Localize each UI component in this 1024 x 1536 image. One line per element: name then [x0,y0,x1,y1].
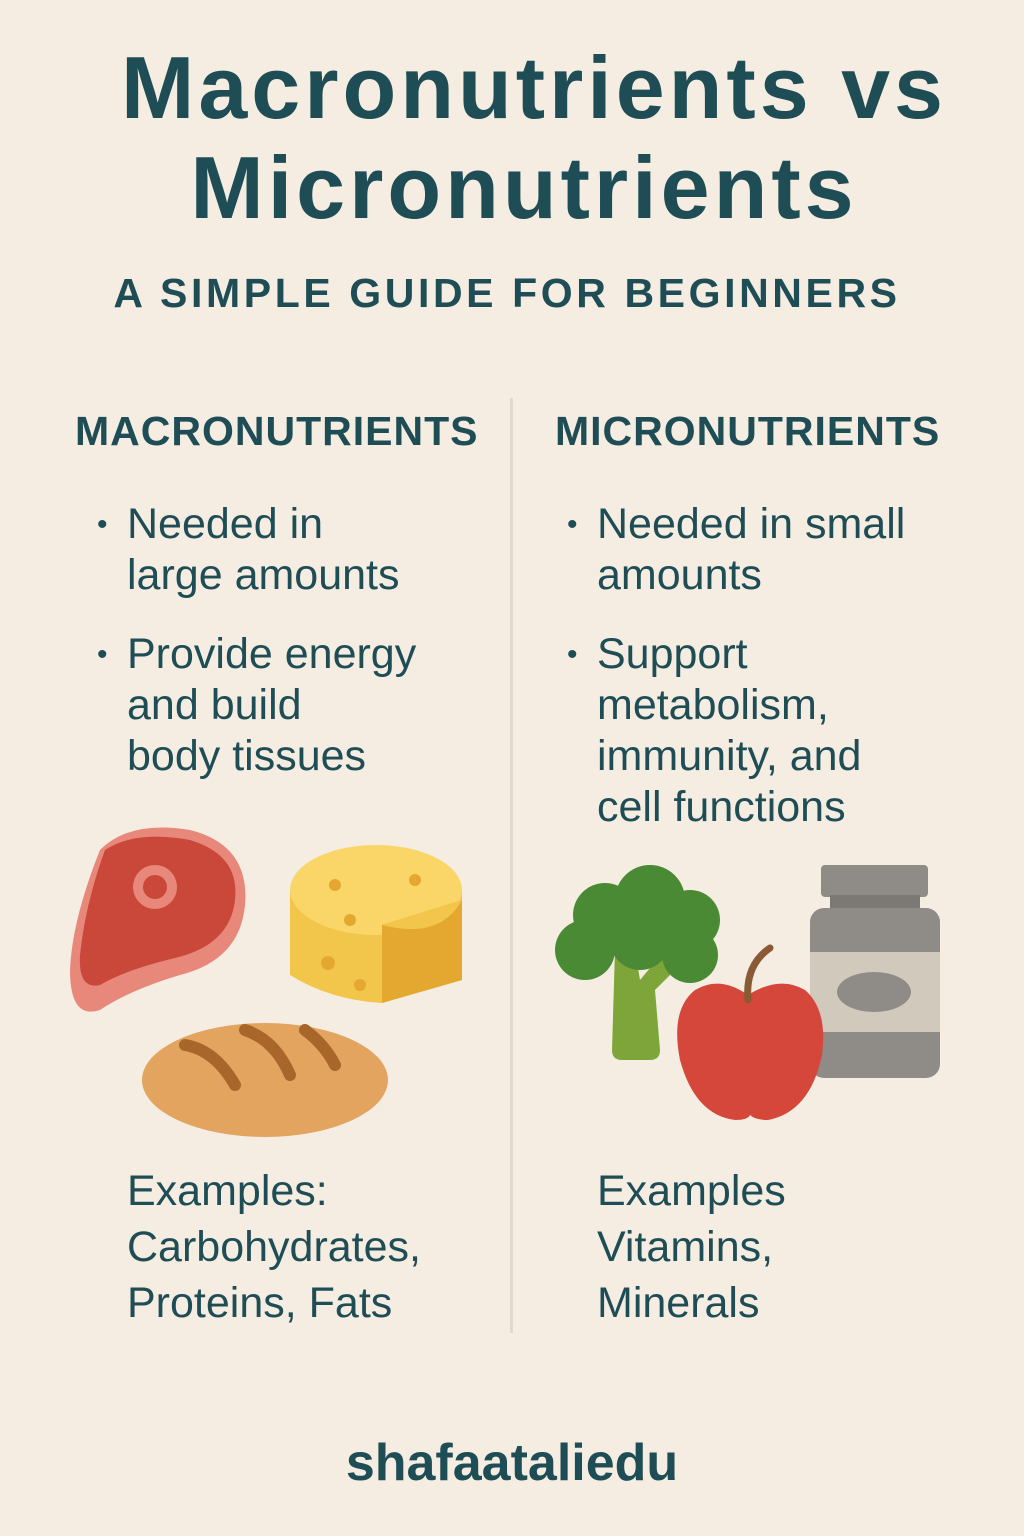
apple [677,948,823,1120]
heading: macronutrients: MACRONUTRIENTS [75,408,478,454]
panel: macronutrients: • [97,508,108,541]
bullet list: micro: immunity, and [597,732,861,780]
divider [510,398,513,1333]
bullet list: macro: and build [127,681,302,729]
icons: broccoli, apple, supplement bottle [555,865,940,1120]
bullet list: micro: Support [597,630,748,678]
panel: macronutrients [70,408,478,1327]
meat [70,828,245,1012]
examples: macro: Proteins, Fats [127,1279,392,1327]
examples: macro: Carbohydrates, [127,1223,421,1271]
bullet list: macro: Needed in [127,500,323,548]
examples: micro [597,1167,786,1327]
bullet list: macro: Provide energy [127,630,416,678]
bullet list: macro: large amounts [127,551,400,599]
heading: micronutrients: MICRONUTRIENTS [555,408,940,454]
examples: macro: Examples: [127,1167,328,1215]
title: Micronutrients [190,138,858,237]
examples: micro: Vitamins, [597,1223,773,1271]
bullet list: macro [97,500,416,780]
panel: micronutrients: • [567,508,578,541]
footer: author: shafaataliedu [346,1434,678,1492]
supplement bottle [810,865,940,1078]
icons: meat, cheese, bread [70,828,462,1137]
title: Macronutrients vs [121,38,947,137]
bread [142,1023,388,1137]
panel: macronutrients: • [97,638,108,671]
cheese [290,845,462,1003]
examples: micro: Minerals [597,1279,760,1327]
bullet list: macro: body tissues [127,732,366,780]
bullet list: micro: metabolism, [597,681,829,729]
panel: micronutrients [555,408,940,1327]
examples: macro [127,1167,421,1327]
panel: micronutrients: • [567,638,578,671]
bullet list: micro: cell functions [597,783,846,831]
bullet list: micro: amounts [597,551,762,599]
bullet list: micro [567,500,905,831]
subtitle: A SIMPLE GUIDE FOR BEGINNERS [113,270,901,316]
bullet list: micro: Needed in small [597,500,905,548]
title [121,38,947,237]
broccoli [555,865,720,1060]
examples: micro: Examples [597,1167,786,1215]
